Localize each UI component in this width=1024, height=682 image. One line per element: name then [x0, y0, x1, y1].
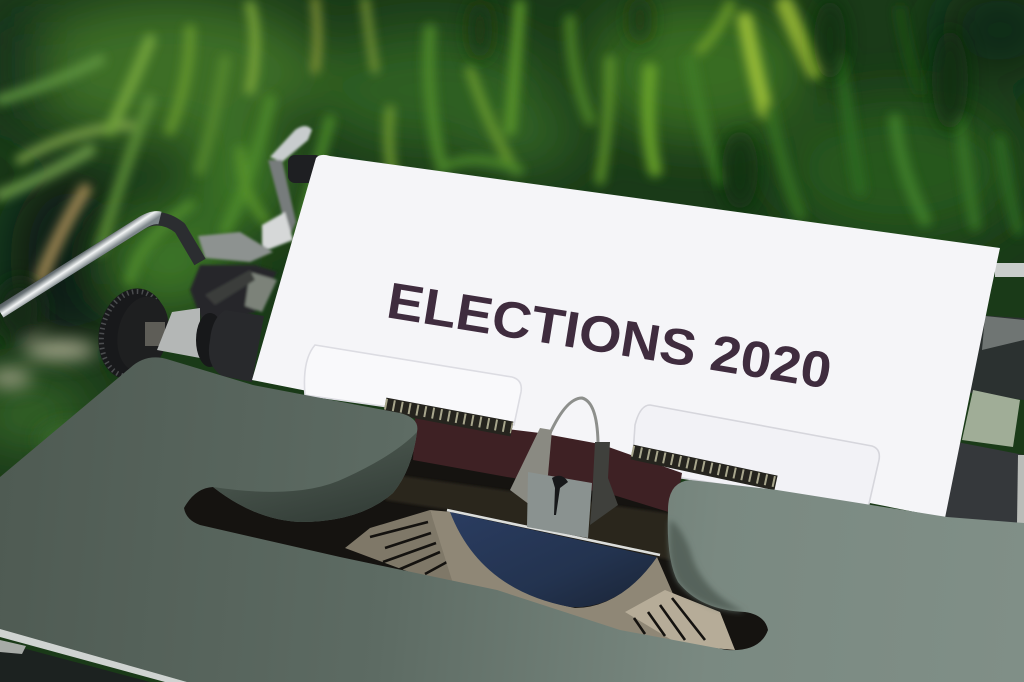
lower-left chrome strip and base: [0, 629, 187, 682]
icon: chrome top lever: [262, 126, 312, 252]
icon: dark roller: [209, 310, 264, 382]
icon: chrome return lever: [0, 218, 200, 312]
paper sheet: [252, 155, 1000, 518]
right flap shadow: [669, 520, 745, 612]
right carriage mechanics: [945, 263, 1024, 526]
icon: dark lower block: [945, 442, 1024, 526]
icon: dark upper housing: [965, 315, 1024, 400]
left flap underside shadow: [213, 432, 417, 522]
icon: chrome scale: [982, 316, 1024, 350]
typewriter body with flaps: [0, 357, 1024, 682]
left carriage mechanics: [0, 126, 322, 386]
icon: wire loop: [547, 398, 598, 442]
heading: ELECTIONS 2020: ELECTIONS 2020: [383, 272, 836, 400]
icon: blue dial face: [450, 512, 657, 607]
right paper window: [632, 405, 879, 508]
icon: gear: [196, 313, 224, 367]
left comb rack: [385, 404, 512, 429]
right comb rack: [632, 451, 776, 483]
left paper window: [304, 345, 521, 425]
icon: silver rod: [995, 263, 1024, 277]
opening interior: [170, 440, 790, 660]
icon: silver rule across the dial: [447, 510, 660, 555]
icon: ribbed platen knob: [90, 282, 176, 386]
icon: black paper knob: [288, 155, 322, 183]
icon: right guide arm: [590, 442, 618, 525]
icon: beige type basket ring: [430, 510, 690, 640]
icon: guide plate: [527, 472, 592, 538]
ribbon belt: [413, 418, 682, 514]
icon: carriage chrome arm: [198, 232, 273, 262]
icon: left guide arm: [510, 428, 552, 505]
icon: dark linkage block: [190, 265, 277, 330]
icon: side strip: [1017, 455, 1024, 524]
metal paper guide: [510, 398, 618, 538]
icon: right type-bar slats: [625, 590, 735, 650]
icon: plate slot: [552, 476, 568, 515]
grimy mechanism floor: [385, 475, 680, 560]
icon: pale green panel: [962, 390, 1020, 447]
icon: left type-bar slats: [345, 510, 455, 582]
icon: chrome bracket: [157, 308, 200, 358]
